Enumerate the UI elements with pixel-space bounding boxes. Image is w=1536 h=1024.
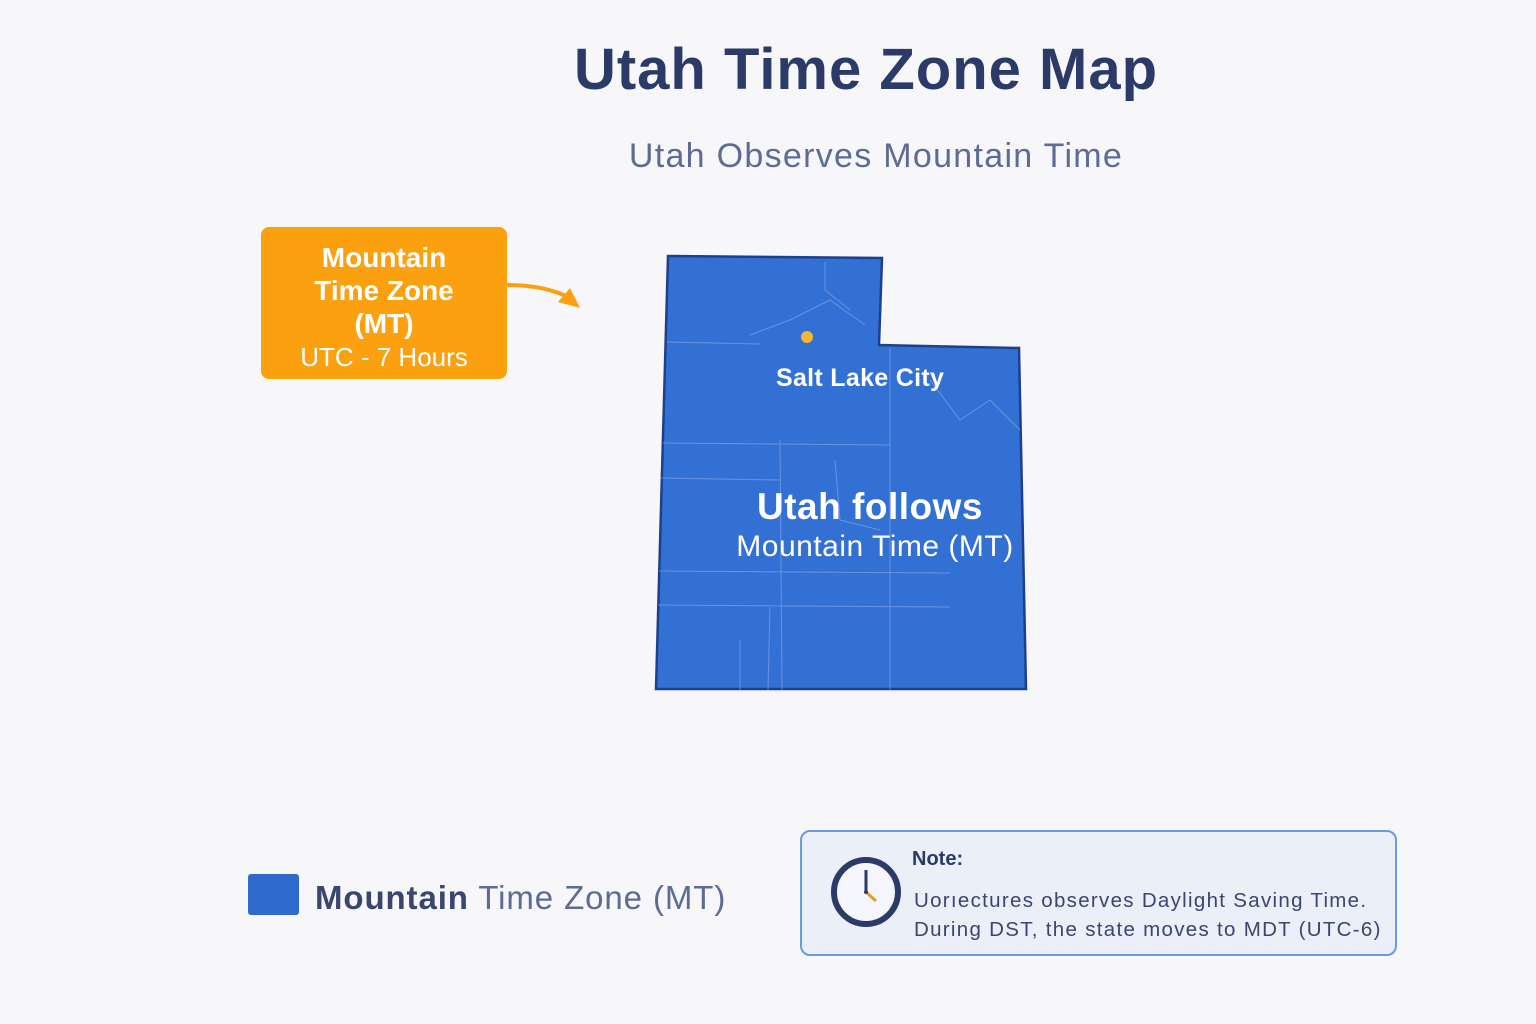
map text: Mountain Time (MT) (736, 530, 1014, 563)
legend: Mountain Time Zone (MT) (315, 879, 726, 916)
note box: During DST, the state moves to MDT (UTC-6) (914, 918, 1382, 941)
callout: mountain time zone: Mountain (322, 242, 446, 273)
callout: mountain time zone: UTC - 7 Hours (300, 342, 468, 372)
note box: Uorıectures observes Daylight Saving Time. (914, 889, 1367, 912)
title: Utah Time Zone Map (574, 37, 1158, 102)
callout: mountain time zone (261, 227, 507, 379)
callout: mountain time zone: (MT) (354, 308, 414, 339)
label: Salt Lake City: Salt Lake City (776, 364, 944, 392)
icon: clock (831, 857, 901, 927)
map text (736, 486, 1014, 563)
subtitle: Utah Observes Mountain Time (629, 137, 1123, 175)
arrow: callout to map (507, 283, 580, 308)
city dot (801, 331, 813, 343)
map text: Utah follows (757, 486, 983, 527)
callout: mountain time zone: Time Zone (314, 275, 454, 306)
note box (800, 830, 1397, 956)
note box: Note: (912, 848, 963, 870)
